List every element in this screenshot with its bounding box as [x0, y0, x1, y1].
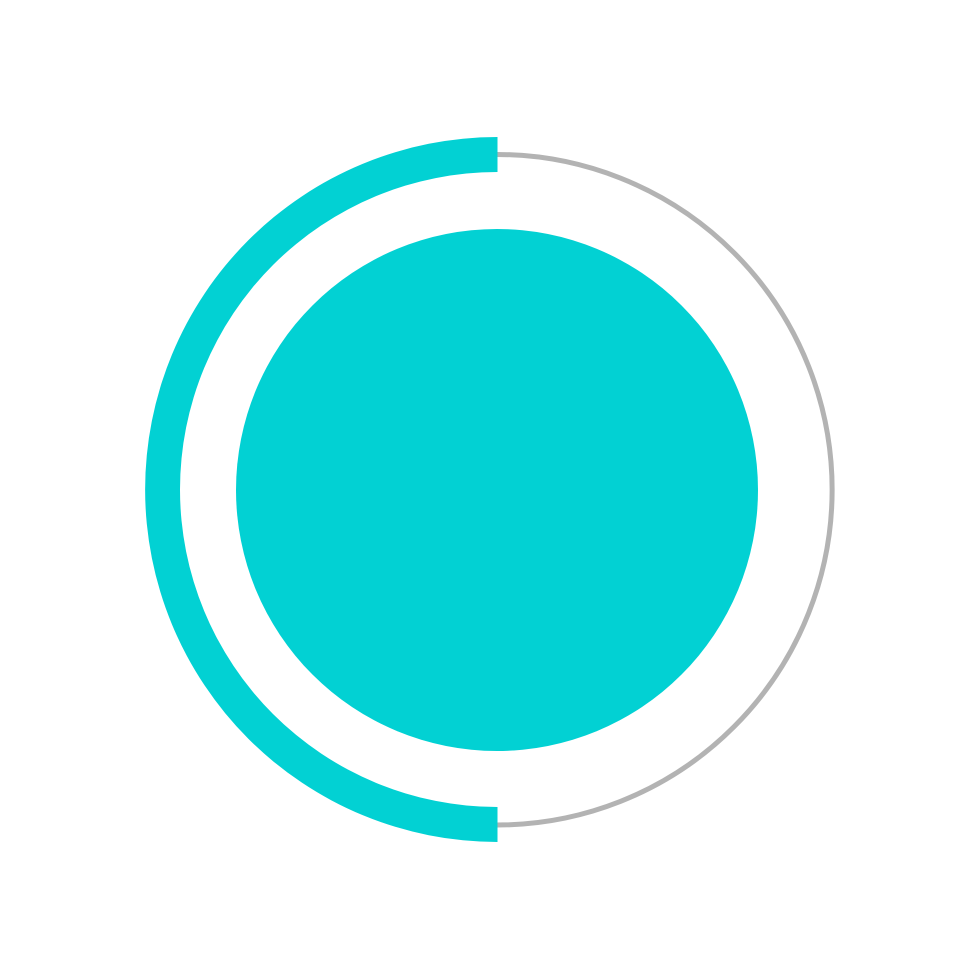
central teal circle	[236, 229, 758, 751]
teal progress arc (left half)	[145, 137, 497, 842]
grey track arc (right half)	[497, 154, 832, 825]
